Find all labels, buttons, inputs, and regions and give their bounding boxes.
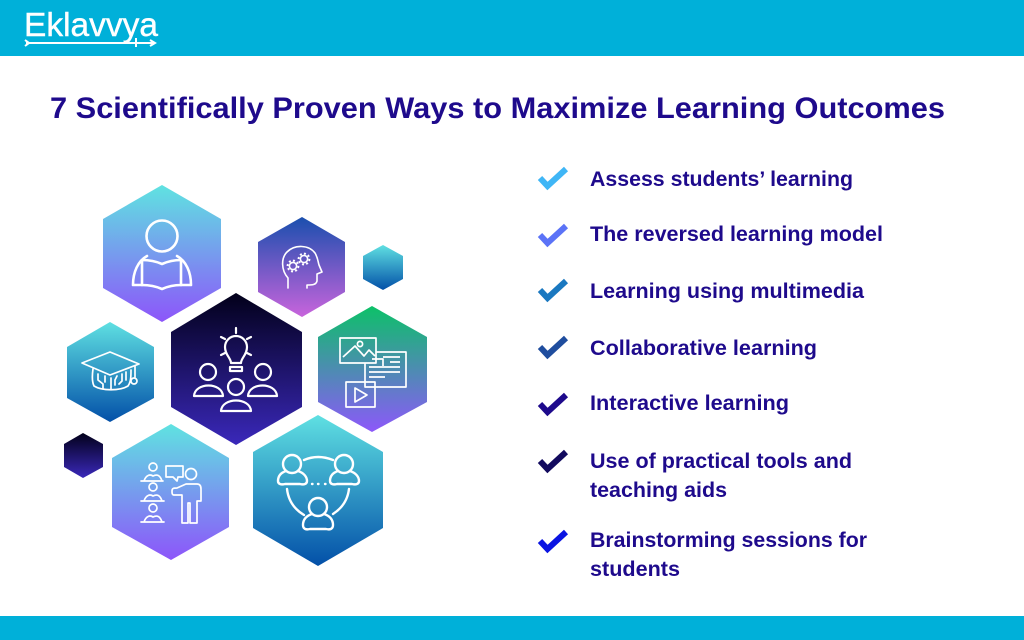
hexagon: brain with gears — [258, 217, 345, 317]
hexagon: small dark accent — [64, 433, 103, 478]
hexagon: teacher and students — [112, 424, 229, 560]
list item 7 — [540, 529, 867, 581]
icon: check — [540, 532, 566, 549]
icon: picture, document and video — [340, 338, 406, 407]
icon: teacher presenting to students — [141, 463, 201, 523]
icon: check — [540, 281, 566, 298]
icon: reader with book — [133, 220, 191, 289]
footer bar — [0, 616, 1024, 640]
icon: cap with circuit lines — [82, 352, 139, 390]
header bar — [0, 0, 1024, 56]
hexagon: multimedia — [318, 306, 427, 432]
icon: head with gears — [283, 246, 322, 288]
list item 2: The reversed learning model — [590, 223, 883, 246]
list item 6: teaching aids — [590, 479, 727, 502]
hexagon: small teal accent — [363, 245, 403, 290]
logo: Eklavvya: Eklavvya — [24, 6, 159, 43]
icon: three people in a circle — [278, 455, 359, 529]
icon: check — [540, 169, 566, 186]
list item 7: Brainstorming sessions for — [590, 529, 867, 552]
list item 6 — [540, 450, 852, 502]
icon: lightbulb over three people — [194, 328, 277, 411]
hexagon: group discussion — [253, 415, 383, 566]
hexagon: central idea — [171, 293, 302, 445]
hexagon: student reading — [103, 185, 221, 322]
list item 1: Assess students’ learning — [590, 168, 853, 191]
icon: check — [540, 395, 566, 412]
list item 7: students — [590, 558, 680, 581]
icon: check — [540, 338, 566, 355]
list item 5: Interactive learning — [590, 392, 789, 415]
list item 4: Collaborative learning — [590, 337, 817, 360]
list item 6: Use of practical tools and — [590, 450, 852, 473]
icon: check — [540, 226, 566, 243]
list item 3: Learning using multimedia — [590, 280, 864, 303]
title: 7 Scientifically Proven Ways to Maximize Learning Outcomes — [50, 92, 945, 125]
hexagon: graduation cap — [67, 322, 154, 422]
icon: check — [540, 452, 566, 469]
